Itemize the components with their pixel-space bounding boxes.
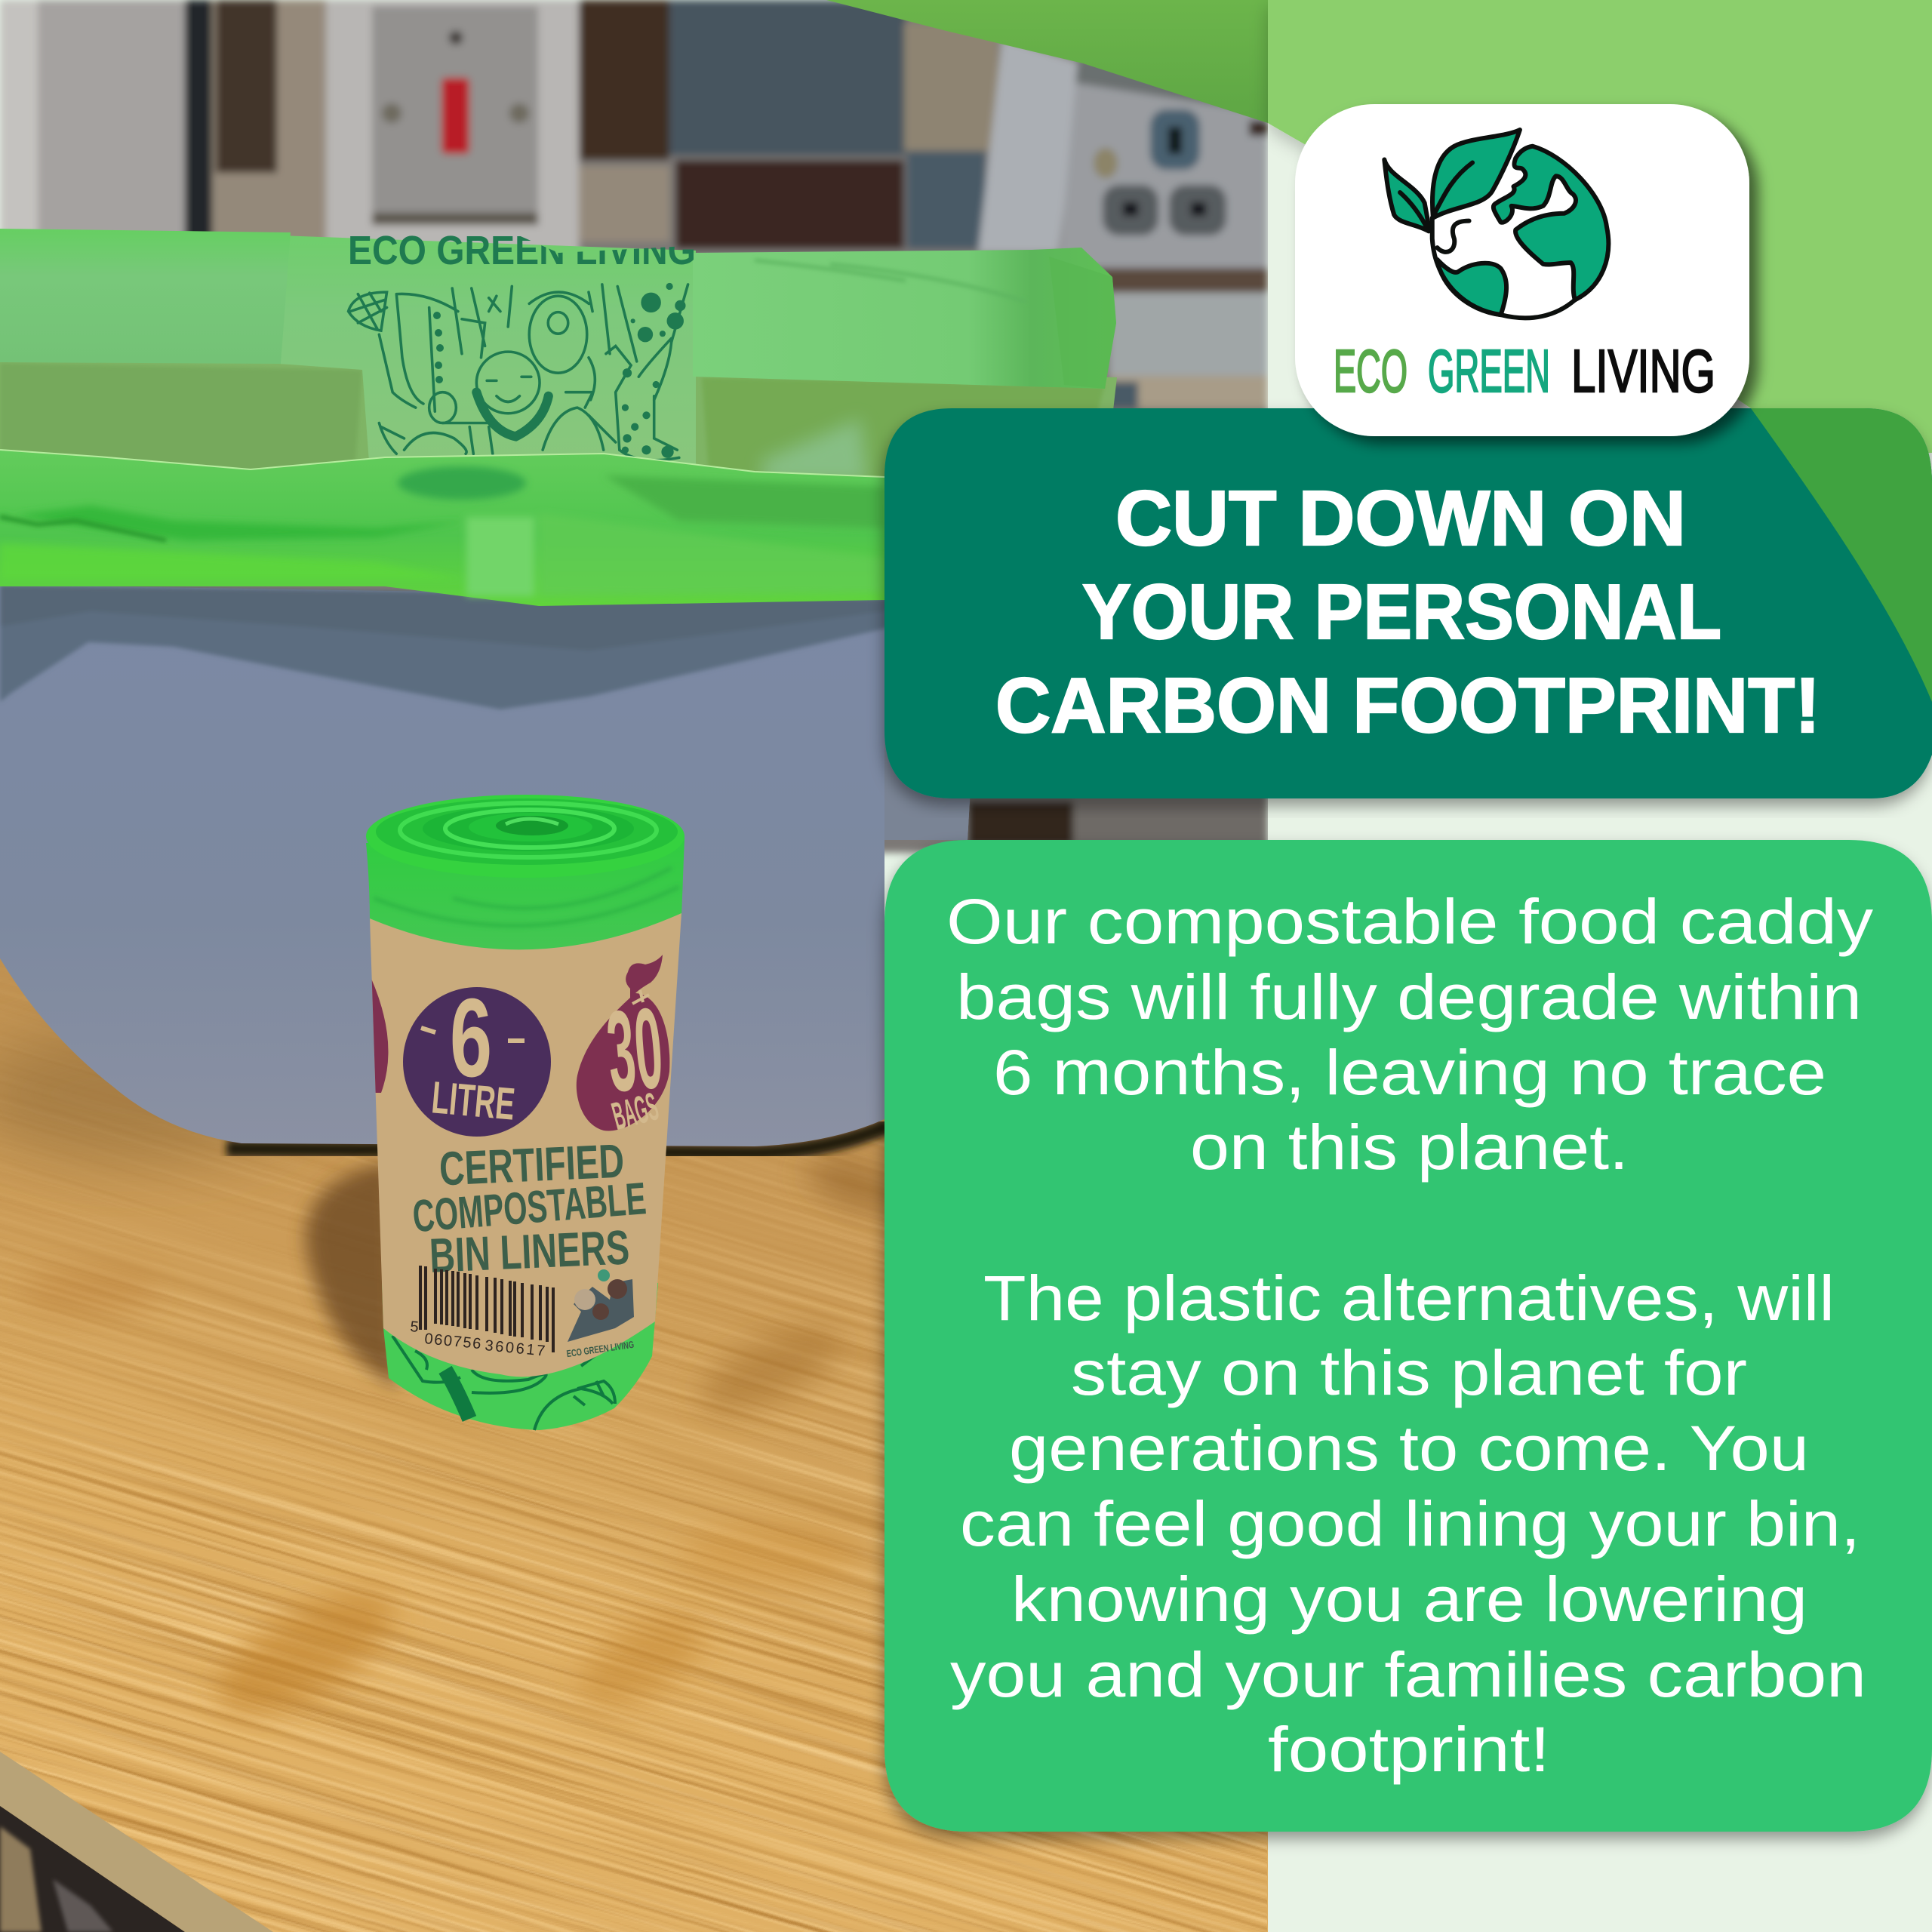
panel accent: medium green corner <box>1751 408 1932 702</box>
roll: top coil <box>366 795 685 878</box>
body text: knowing you are lowering <box>1011 1564 1807 1635</box>
label: brand illustration: ECO GREEN LIVING <box>566 1339 635 1359</box>
body text: footprint! <box>1268 1714 1550 1785</box>
logo wordmark <box>1334 337 1715 405</box>
label: brand illustration <box>566 1269 635 1359</box>
photo: shadow cast by roll <box>306 1162 400 1389</box>
body text: you and your families carbon <box>950 1639 1866 1710</box>
liner: upper right band <box>693 248 1116 389</box>
label: product name <box>411 1134 648 1283</box>
logo card <box>1295 104 1749 436</box>
photo: roll of certified compostable bin liners <box>366 795 685 1430</box>
label: 30 bags sack badge: BAGS <box>608 1084 663 1139</box>
roll: kraft paper label: 30 <box>602 983 667 1116</box>
roll: green band below top <box>366 838 685 952</box>
label: 6 litre badge: LITRE <box>429 1072 517 1130</box>
body text: bags will fully degrade within <box>956 961 1862 1032</box>
roll: printed artwork on green <box>392 1336 615 1430</box>
liner: centre panel <box>279 235 696 483</box>
body text: can feel good lining your bin, <box>960 1488 1860 1559</box>
roll: bottom green section <box>382 1283 658 1430</box>
photo: green compostable liner in caddy <box>0 228 1117 606</box>
label: product name: CERTIFIED <box>438 1134 626 1196</box>
background: light green top-right shape <box>1268 0 1932 453</box>
body text: generations to come. You <box>1009 1413 1809 1484</box>
label: product name: COMPOSTABLE <box>411 1173 648 1241</box>
liner: printed buttons <box>433 312 444 383</box>
panel: headline <box>884 408 1932 798</box>
liner: shadowed inner bag <box>0 355 1117 491</box>
body text: stay on this planet for <box>1071 1337 1747 1408</box>
photo: grey food caddy <box>0 585 981 1146</box>
body text: Our compostable food caddy <box>946 886 1873 957</box>
label: 6 litre badge: 6 <box>450 976 492 1100</box>
label: 6 litre badge <box>403 976 551 1137</box>
body text: The plastic alternatives, will <box>983 1263 1835 1334</box>
roll: kraft paper label <box>369 913 681 1377</box>
swoosh: translucent green top curve <box>826 0 1268 123</box>
icon: globe with leaves <box>1384 130 1608 318</box>
heading text: CARBON FOOTPRINT! <box>995 662 1820 749</box>
logo wordmark: LIVING <box>1571 337 1715 405</box>
photo: blurred wall with switch and socket <box>0 0 1268 853</box>
body text: 6 months, leaving no trace <box>993 1037 1826 1108</box>
photo: wooden worktop <box>0 936 1268 1932</box>
liner: printed wordmark: ECO GREEN LIVING <box>348 228 696 273</box>
heading text: CUT DOWN ON <box>1115 475 1686 561</box>
label: product name: BIN LINERS <box>429 1220 630 1283</box>
liner: printed illustration left <box>349 286 604 454</box>
panel: body copy <box>884 840 1932 1832</box>
body text <box>946 886 1873 1785</box>
photo: worktop front edge <box>0 1752 273 1932</box>
heading text: YOUR PERSONAL <box>1082 568 1721 655</box>
background: right side pale panel <box>1268 0 1932 1932</box>
logo wordmark: ECO <box>1334 337 1407 405</box>
liner: folded-over rim <box>0 450 884 606</box>
photo: shadow under caddy <box>226 1124 891 1153</box>
label: barcode: 060756 <box>424 1331 481 1352</box>
body text: on this planet. <box>1190 1112 1629 1183</box>
heading text <box>995 475 1820 749</box>
liner: upper left band <box>0 229 291 364</box>
label: barcode: 5 <box>410 1318 420 1336</box>
label: 30 bags sack badge <box>577 955 669 1139</box>
logo wordmark: GREEN <box>1428 337 1550 405</box>
photo: kitchen scene with caddy and roll of liners <box>0 0 1268 1932</box>
label: barcode: 360617 <box>485 1337 546 1360</box>
label: barcode <box>410 1266 553 1360</box>
liner: printed illustration right <box>589 283 688 460</box>
